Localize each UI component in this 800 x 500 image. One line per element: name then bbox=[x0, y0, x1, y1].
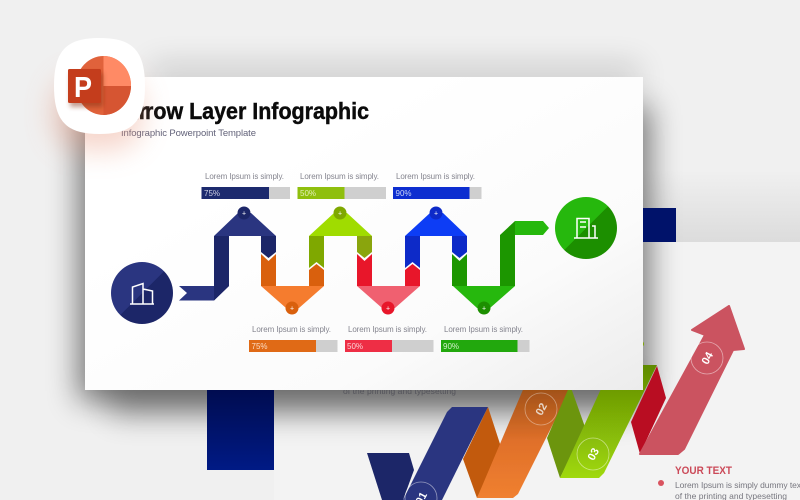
arrow ribbon back slide bbox=[367, 306, 744, 500]
bar 75% orange: Lorem Ipsum is simply. bbox=[252, 325, 331, 334]
card bottom shadow extension bbox=[110, 380, 640, 416]
bar 90% blue bbox=[393, 172, 482, 199]
navy block upper right bbox=[643, 208, 676, 242]
marker pins: + bbox=[482, 306, 486, 312]
app icon glow bbox=[52, 75, 142, 150]
bar 75% navy: Lorem Ipsum is simply. bbox=[205, 172, 284, 181]
back slide bbox=[274, 242, 800, 500]
back slide text callout: YOUR TEXT bbox=[675, 465, 732, 477]
tail bbox=[179, 286, 229, 300]
step badge 02 bbox=[525, 393, 557, 425]
bar 75% orange: 75% bbox=[252, 342, 268, 351]
green fold and arrow head bbox=[452, 221, 549, 308]
step badge 02: 02 bbox=[534, 401, 550, 418]
bottom bars bbox=[249, 325, 530, 352]
bar 90% green bbox=[441, 325, 530, 352]
marker pins: + bbox=[434, 210, 438, 218]
bar 50% lime bbox=[298, 172, 386, 199]
app icon: PowerPoint bbox=[54, 38, 145, 134]
main white card bbox=[85, 77, 643, 390]
bar 90% green: Lorem Ipsum is simply. bbox=[444, 325, 523, 334]
bar 50% red: Lorem Ipsum is simply. bbox=[348, 325, 427, 334]
navy fold bbox=[214, 213, 276, 300]
card shadow bbox=[78, 105, 650, 401]
bar 90% blue: Lorem Ipsum is simply. bbox=[396, 172, 475, 181]
bar 75% navy: 75% bbox=[204, 189, 220, 198]
red fold bbox=[357, 254, 420, 308]
step badge 04: 04 bbox=[700, 349, 716, 367]
back slide text callout: Lorem Ipsum is simply dummy tex bbox=[675, 480, 800, 490]
step badge 01 bbox=[405, 482, 437, 500]
bar 90% blue: 90% bbox=[396, 189, 412, 198]
navy block top edge over shadow bbox=[207, 390, 274, 470]
title: row Layer Infographic bbox=[145, 98, 369, 124]
icon: start circle with buildings bbox=[111, 262, 173, 324]
marker pins: + bbox=[242, 210, 246, 218]
bar 50% lime: Lorem Ipsum is simply. bbox=[300, 172, 379, 181]
marker pins bbox=[238, 206, 490, 314]
bar 75% orange bbox=[249, 325, 338, 352]
navy block lower left bbox=[207, 380, 274, 470]
bar 75% navy bbox=[202, 172, 290, 199]
orange fold bbox=[261, 254, 324, 308]
bar 90% green: 90% bbox=[443, 342, 459, 351]
title: Ar bbox=[122, 98, 148, 124]
clipped back slide text: of the printing and typesetting bbox=[343, 386, 456, 396]
bar 50% red bbox=[345, 325, 434, 352]
soft shading upper right bbox=[643, 170, 800, 242]
subtitle: Infographic Powerpoint Template bbox=[121, 128, 256, 139]
back slide text callout bbox=[658, 465, 800, 500]
step badge 03: 03 bbox=[586, 446, 602, 463]
blue fold bbox=[405, 213, 467, 268]
icon: end circle with buildings bbox=[555, 197, 617, 259]
zigzag arrow ribbon bbox=[179, 206, 549, 314]
card top shadow bbox=[150, 62, 640, 92]
bar 50% red: 50% bbox=[347, 342, 363, 351]
top bars bbox=[202, 172, 482, 199]
marker pins: + bbox=[338, 210, 342, 218]
marker pins: + bbox=[386, 306, 390, 312]
step badge 03 bbox=[577, 438, 609, 470]
navy block right over shadow bbox=[643, 208, 676, 242]
bar 50% lime: 50% bbox=[300, 189, 316, 198]
marker pins: + bbox=[290, 306, 294, 312]
step badge 04 bbox=[691, 342, 723, 374]
lime fold bbox=[309, 213, 372, 268]
app icon: PowerPoint: P bbox=[74, 72, 92, 104]
